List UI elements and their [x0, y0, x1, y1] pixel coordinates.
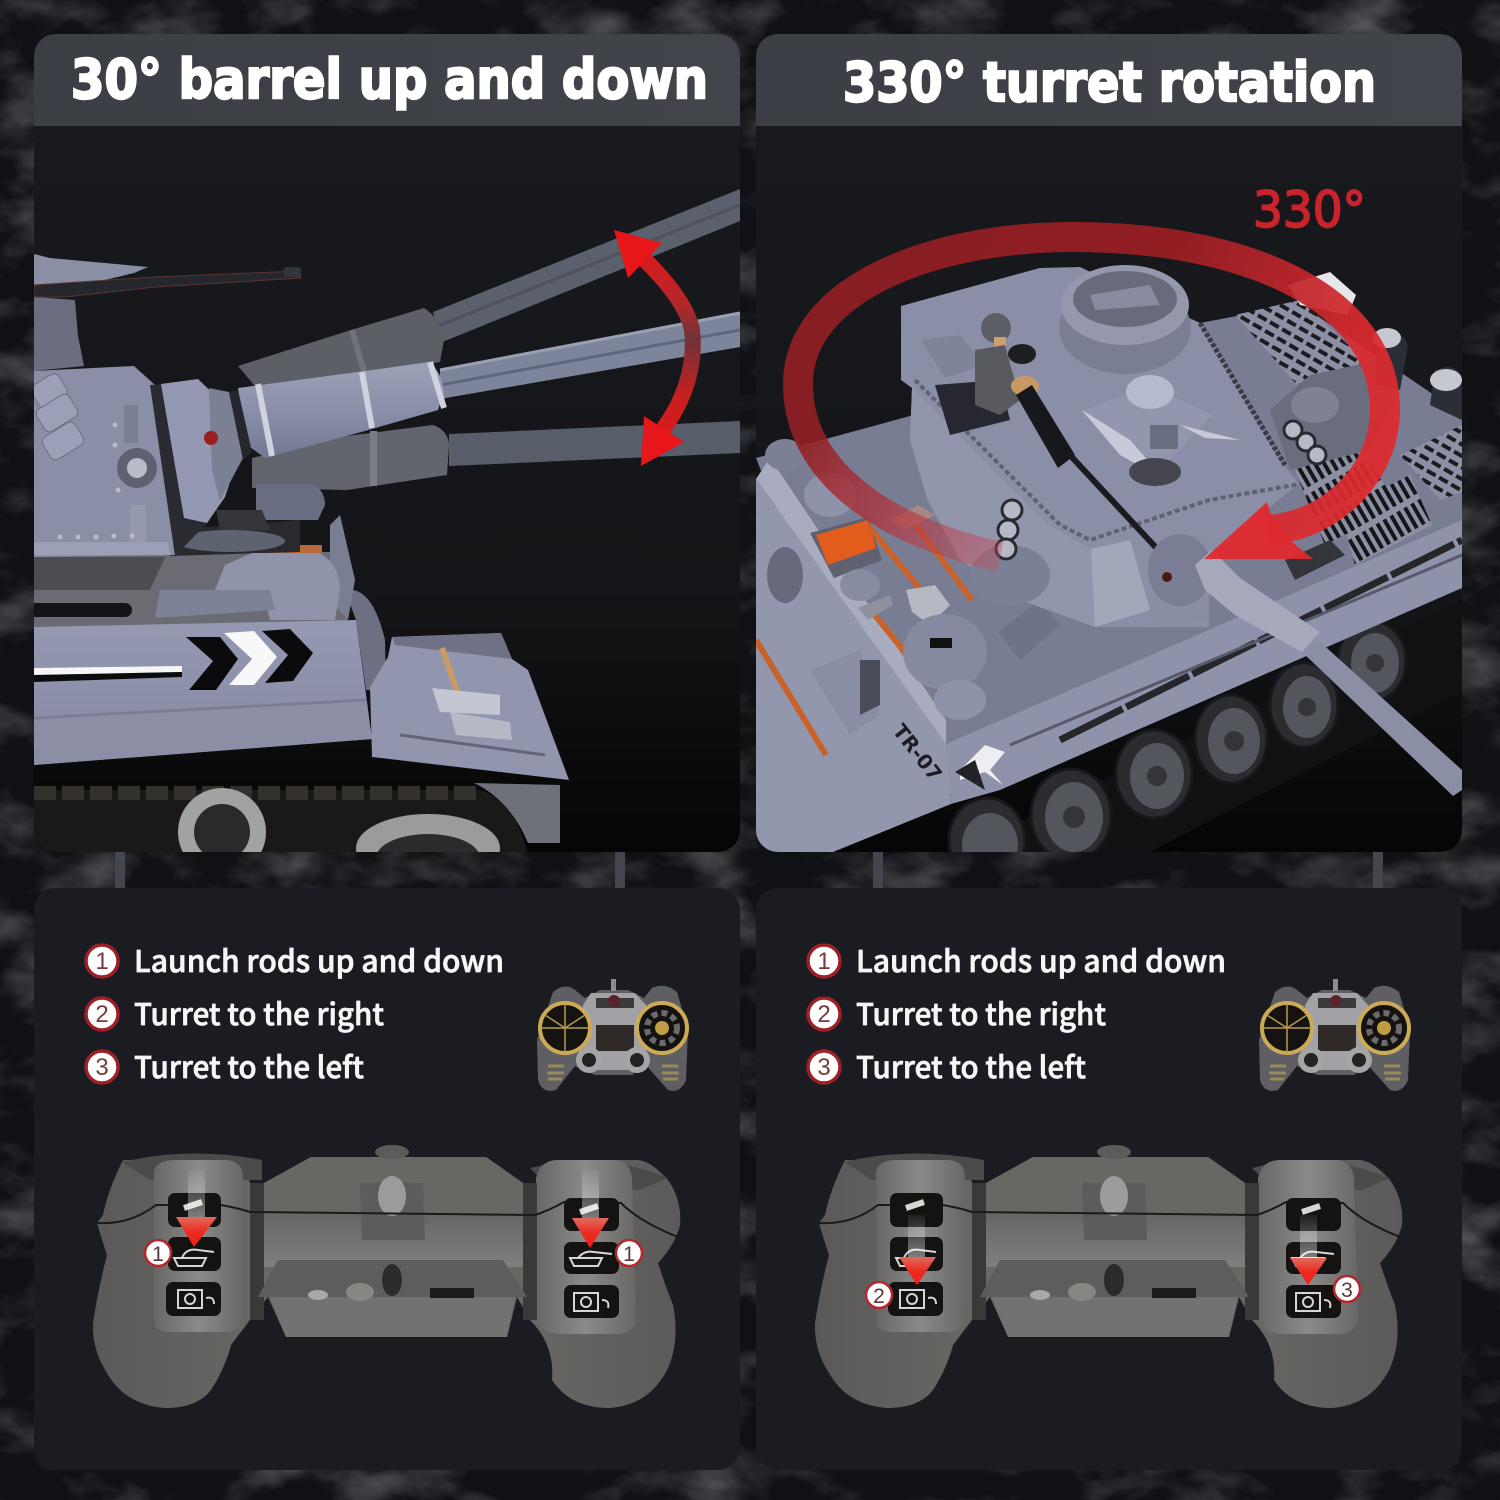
legend: barrel controls: 1	[95, 948, 109, 975]
legend: turret controls	[808, 937, 1226, 1087]
deck tools	[756, 439, 1060, 755]
soldier figure	[975, 313, 1039, 415]
legend: barrel controls: 3	[95, 1054, 109, 1081]
main gun, right panel	[1148, 534, 1462, 796]
arrow and marker: left button	[866, 1215, 936, 1308]
heading: turret: 330° turret rotation	[843, 51, 1376, 114]
turret, right panel	[901, 265, 1300, 627]
arrow and marker: right button	[572, 1170, 642, 1266]
legend: turret controls: 3	[817, 1054, 831, 1081]
legend: barrel controls: Launch rods up and down	[134, 937, 504, 981]
controller back view	[93, 1145, 680, 1408]
machine gun, right panel	[1016, 385, 1161, 553]
icon: small controller front	[1259, 979, 1410, 1091]
chevron marking	[34, 629, 313, 690]
header bar: barrel	[34, 34, 740, 126]
controller back view	[815, 1145, 1402, 1408]
engine deck grills	[1235, 272, 1462, 580]
legend: barrel controls: 2	[95, 1001, 109, 1028]
icon: small controller front	[537, 979, 688, 1091]
machine gun, left panel	[34, 254, 301, 297]
legend: barrel controls: Turret to the right	[134, 990, 384, 1034]
heading: barrel: 30° barrel up and down	[71, 48, 708, 111]
arrow and marker: left button: 2	[873, 1285, 885, 1308]
arrow: barrel up and down	[614, 230, 693, 466]
arrow and marker: right button: 3	[1341, 1279, 1353, 1302]
tank hull, left panel	[34, 484, 569, 882]
tank hull, right panel: TR-07	[888, 719, 947, 786]
label: 330 degrees: 330°	[1253, 181, 1366, 239]
ghost barrel: raised	[238, 189, 740, 392]
arrow and marker: right button	[1290, 1215, 1360, 1302]
legend: turret controls: Turret to the left	[856, 1043, 1086, 1087]
panel: barrel controls	[34, 888, 740, 1470]
legend: turret controls: Turret to the right	[856, 990, 1106, 1034]
tracks and road wheels	[948, 624, 1407, 852]
ghost barrel: lowered	[252, 421, 740, 490]
legend: barrel controls: Turret to the left	[134, 1043, 364, 1087]
arrow and marker: left button: 1	[152, 1243, 164, 1266]
legend: turret controls: 1	[817, 948, 831, 975]
arrow and marker: right button: 1	[623, 1243, 635, 1266]
legend: barrel controls	[86, 937, 504, 1087]
panel: turret controls	[756, 888, 1462, 1470]
panel: barrel elevation	[29, 34, 740, 882]
arrow and marker: left button	[145, 1170, 217, 1266]
connector bars	[115, 852, 1383, 888]
main barrel	[238, 312, 740, 458]
legend: turret controls: Launch rods up and down	[856, 937, 1226, 981]
arrow: 330 degree rotation	[798, 237, 1385, 559]
header bar: turret	[756, 34, 1462, 126]
panel: turret rotation	[756, 34, 1462, 882]
turret, left panel	[29, 297, 252, 557]
tank hull, right panel	[756, 304, 1462, 852]
legend: turret controls: 2	[817, 1001, 831, 1028]
